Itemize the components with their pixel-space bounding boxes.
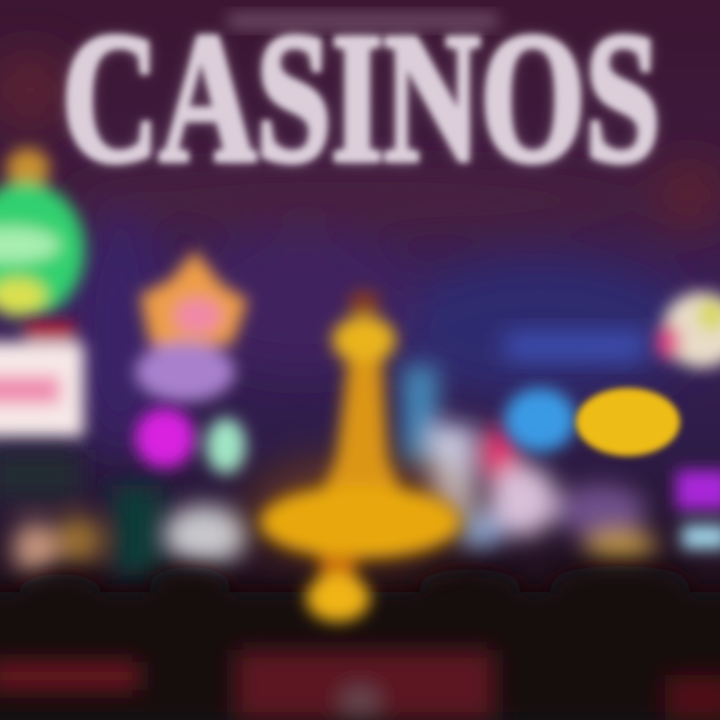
magenta and teal lights: [135, 408, 246, 474]
crowd silhouettes: [0, 566, 720, 720]
blue panel: [505, 332, 645, 360]
tower body: [260, 291, 460, 622]
illegible faint line above title: [228, 13, 498, 29]
right purple sign: [676, 470, 720, 549]
tower glow: [250, 460, 470, 560]
blue dome: [504, 388, 576, 452]
left green globe sign: [0, 148, 85, 318]
lower pale sign: [163, 505, 247, 565]
right multicolour ball: [656, 292, 720, 368]
background glow: [0, 50, 720, 450]
yellow dome: [576, 388, 680, 456]
left lower signs: [0, 450, 162, 575]
red seats: [0, 650, 720, 720]
blue tower and lower right lights: [402, 365, 656, 561]
golden tower: [250, 291, 470, 622]
star sign: [135, 250, 248, 402]
left white and pink sign: [0, 322, 84, 438]
